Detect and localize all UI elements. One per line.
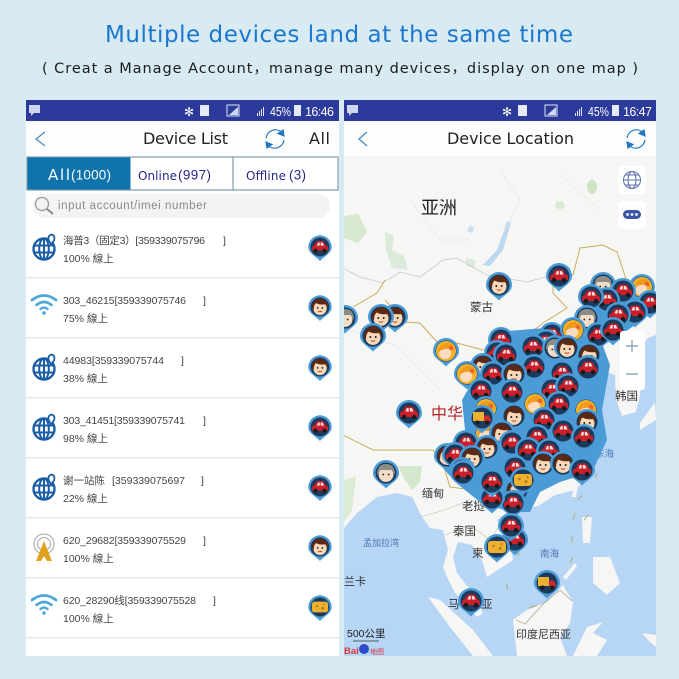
device row 5: [359339075697 bbox=[112, 475, 185, 487]
map labels: 中华人 bbox=[431, 405, 479, 423]
map labels: 亚洲 bbox=[421, 198, 457, 218]
panel: device location phone screen bbox=[332, 100, 663, 657]
tabs: all, online, offline: (3) bbox=[289, 168, 306, 182]
device row 4: ] bbox=[203, 415, 206, 427]
land: asia mainland bbox=[344, 156, 656, 617]
header: device list: All bbox=[309, 129, 330, 148]
device row 7 bbox=[26, 594, 339, 638]
map labels: 缅甸 bbox=[422, 486, 444, 500]
map labels: 马 bbox=[448, 598, 460, 611]
device row 7: 100% 線上 bbox=[63, 612, 114, 625]
status bar: device list: 45% bbox=[270, 105, 291, 119]
device row 7: ] bbox=[213, 595, 216, 607]
device row 1 bbox=[26, 234, 339, 278]
device row 2 bbox=[26, 295, 339, 338]
map labels: 东海 bbox=[595, 448, 614, 460]
button: more bbox=[618, 201, 646, 229]
device row 4 bbox=[26, 414, 339, 458]
map labels: 印度尼西亚 bbox=[516, 627, 571, 641]
device row 1: 100% 線上 bbox=[63, 252, 114, 265]
device row 5: 22% 線上 bbox=[63, 492, 108, 505]
device row 7: 620_28290线[359339075528 bbox=[63, 594, 196, 607]
tabs: all, online, offline: (1000) bbox=[71, 168, 111, 182]
device row 4: 303_41451[359339075741 bbox=[63, 415, 185, 427]
borders bbox=[343, 170, 627, 624]
map labels: 兰卡 bbox=[344, 575, 366, 588]
device row 5: 谢一站陈 bbox=[63, 474, 105, 487]
sea bbox=[344, 335, 656, 656]
map labels: 柬 bbox=[472, 547, 484, 560]
search box bbox=[32, 194, 330, 218]
cluster underlay bbox=[438, 328, 610, 512]
device row 1: 海普3（固定3）[359339075796 bbox=[63, 234, 205, 247]
status bar: device location: 16:47 bbox=[623, 105, 652, 119]
map labels: 孟加拉湾 bbox=[363, 537, 399, 548]
title: Multiple devices land at the same time bbox=[105, 22, 573, 48]
device row 2: 303_46215[359339075746 bbox=[63, 295, 186, 307]
baidu logo: Bai bbox=[344, 646, 359, 657]
map labels: 韩国 bbox=[615, 389, 638, 403]
status bar: device list: 16:46 bbox=[305, 105, 334, 119]
map labels: 亚 bbox=[481, 599, 492, 611]
device row 6: 100% 線上 bbox=[63, 552, 114, 565]
map bbox=[332, 156, 663, 657]
green areas and lakes bbox=[344, 180, 597, 522]
device row 3 bbox=[26, 354, 339, 398]
map labels: 蒙古 bbox=[470, 300, 493, 314]
device row 2: ] bbox=[203, 295, 206, 307]
subtitle: ( Creat a Manage Account，manage many devices，display on one map ) bbox=[42, 61, 638, 77]
map labels bbox=[344, 198, 638, 641]
device row 4: 98% 線上 bbox=[63, 432, 108, 445]
status bar: device location bbox=[344, 100, 656, 121]
device row 6: 620_29682[359339075529 bbox=[63, 535, 186, 547]
icon: signal tower bbox=[34, 534, 54, 561]
tabs: all, online, offline: (997) bbox=[178, 168, 211, 182]
device row 5 bbox=[26, 474, 339, 518]
device row 6 bbox=[26, 534, 339, 578]
header: device list bbox=[26, 121, 339, 156]
header: device list: Device List bbox=[143, 129, 228, 148]
device row 3: 38% 線上 bbox=[63, 372, 108, 385]
device row 6: ] bbox=[203, 535, 206, 547]
tabs: all, online, offline: All bbox=[48, 166, 70, 184]
baidu logo bbox=[344, 644, 384, 655]
button: globe bbox=[618, 166, 646, 194]
device row 3: 44983[359339075744 bbox=[63, 355, 164, 367]
map labels: 南海 bbox=[540, 548, 560, 560]
status bar: device location: ✻ bbox=[502, 105, 512, 119]
map labels: 泰国 bbox=[453, 524, 476, 538]
search box: input account/imei number bbox=[58, 200, 207, 212]
tabs: all, online, offline: Online bbox=[138, 169, 177, 183]
map labels: 老挝 bbox=[462, 499, 485, 513]
status bar: device location: 45% bbox=[588, 105, 609, 119]
tabs: all, online, offline bbox=[27, 157, 338, 190]
header: device location bbox=[344, 121, 656, 156]
device row 1: ] bbox=[223, 235, 226, 247]
device row 5: ] bbox=[201, 475, 204, 487]
panel: device list phone screen bbox=[26, 100, 339, 656]
land: islands bbox=[428, 402, 656, 656]
baidu logo: 地图 bbox=[370, 647, 384, 656]
sea dashes bbox=[507, 473, 597, 608]
zoom control bbox=[620, 331, 645, 390]
device pins bbox=[332, 263, 663, 616]
status bar: device list bbox=[26, 100, 339, 121]
header: device location: Device Location bbox=[447, 129, 574, 148]
device row 3: ] bbox=[181, 355, 184, 367]
status bar: device list: ✻ bbox=[184, 105, 194, 119]
device row 2: 75% 線上 bbox=[63, 312, 108, 325]
scale bar: 500公里 bbox=[347, 628, 386, 640]
tabs: all, online, offline: Offline bbox=[246, 169, 286, 183]
